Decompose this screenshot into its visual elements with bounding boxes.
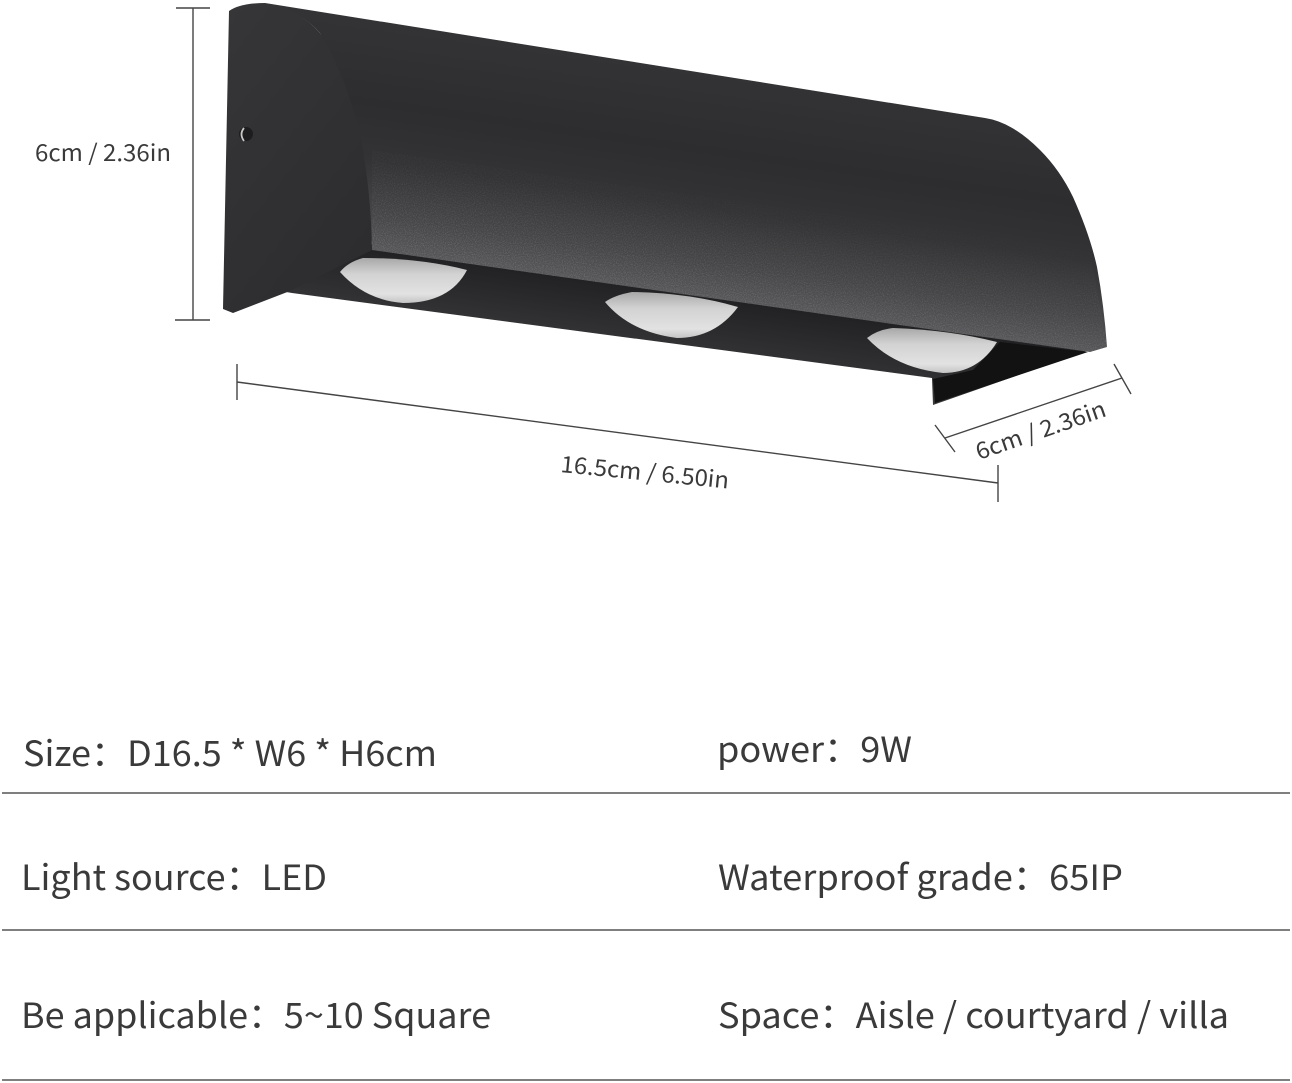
spec: power: power：9W <box>717 722 912 773</box>
spec: space: Space：Aisle / courtyard / villa <box>718 988 1229 1039</box>
spec: applicable area: Be applicable：5~10 Square <box>21 988 491 1039</box>
lamp curved body <box>265 3 1107 352</box>
dimension: length <box>237 364 998 502</box>
spec: size: Size：D16.5 * W6 * H6cm <box>23 726 437 777</box>
lamp underside strip <box>280 240 1090 405</box>
wall lamp product photo <box>223 3 1107 405</box>
dark inner corner of underside <box>933 342 1088 403</box>
dimension: width <box>935 364 1131 467</box>
screw <box>239 127 253 141</box>
lens 1 <box>340 258 467 303</box>
dimension: height: 6cm / 2.36in <box>35 134 171 168</box>
dimension: height <box>35 8 210 320</box>
lamp end plate <box>223 3 372 313</box>
spec: waterproof grade: Waterproof grade：65IP <box>718 850 1123 901</box>
dimension: length: 16.5cm / 6.50in <box>559 445 731 495</box>
body grain texture <box>372 150 1107 352</box>
lens 3 <box>867 328 997 373</box>
lens 2 <box>605 292 738 338</box>
spec: light source: Light source：LED <box>21 850 327 901</box>
dimension: width: 6cm / 2.36in <box>970 390 1110 467</box>
